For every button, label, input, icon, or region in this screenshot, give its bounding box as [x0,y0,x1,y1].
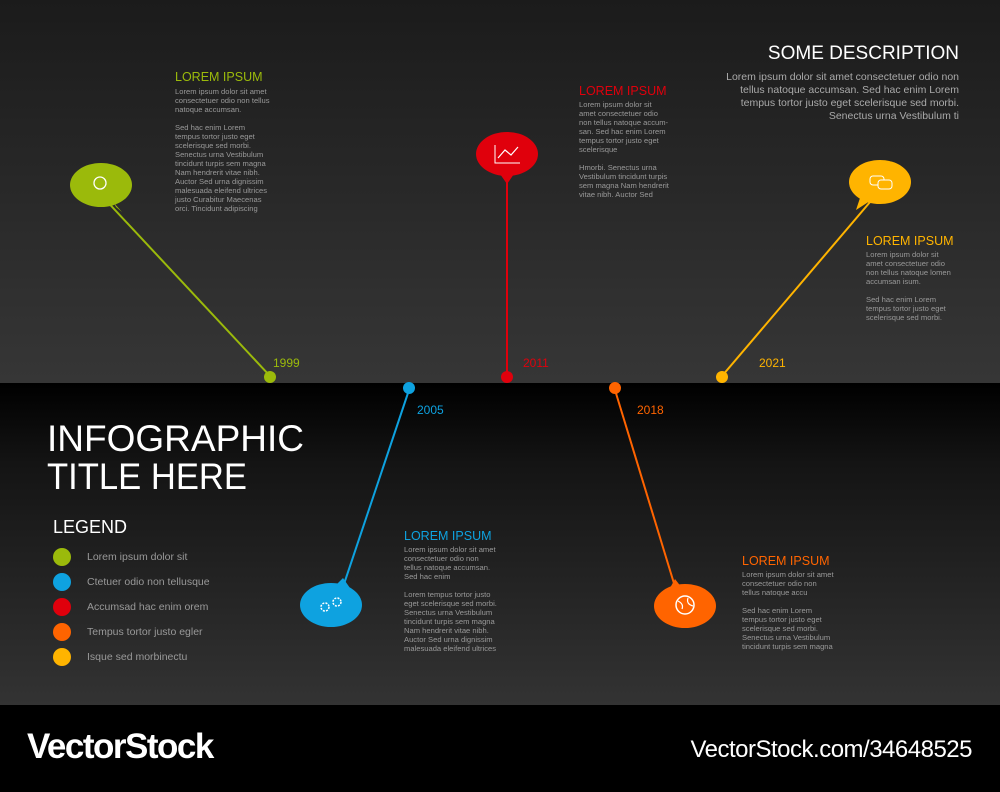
text: 2005: tincidunt turpis sem magna [404,617,496,626]
bottom background [0,383,1000,705]
text: 2021: Sed hac enim Lorem [866,295,936,304]
text: 2018: tempus tortor justo eget [742,615,823,624]
text: 1999: LOREM IPSUM [175,70,263,84]
text: 1999: Auctor Sed urna dignissim [175,177,264,186]
text: 2005: Nam hendrerit vitae nibh. [404,626,489,635]
pin: 2011 red: 2011 [523,356,549,370]
text: 2021: tempus tortor justo eget [866,304,947,313]
text: 2011: Lorem ipsum dolor sit [579,100,652,109]
pin: 2018 orange: 2018 [637,403,664,417]
description block: tellus natoque accumsan. Sed hac enim Lorem [740,84,959,96]
text: 1999: Sed hac enim Lorem [175,123,245,132]
description block: SOME DESCRIPTION [768,43,959,64]
text: 2005: LOREM IPSUM [404,529,492,543]
text: 2005: malesuada eleifend ultrices [404,644,496,653]
text: 1999: tempus tortor justo eget [175,132,256,141]
description block: tempus tortor justo eget scelerisque sed morbi. [741,97,959,109]
text: 2011: sem magna Nam hendrerit [579,181,670,190]
text: 2018: Senectus urna Vestibulum [742,633,830,642]
legend: Isque sed morbinectu [87,651,188,663]
text: 2021 [866,234,954,322]
text: 2018: consectetuer odio non [742,579,817,588]
legend [53,517,210,666]
pin: 1999 green: 1999 [273,356,300,370]
text: 2011: tempus tortor justo eget [579,136,660,145]
pin: 2021 yellow [716,160,911,383]
text: 2005: tellus natoque accumsan. [404,563,490,572]
text: 2018: tincidunt turpis sem magna [742,642,834,651]
text: 1999: tincidunt turpis sem magna [175,159,267,168]
title: INFOGRAPHIC [47,418,304,459]
text: 2021: LOREM IPSUM [866,234,954,248]
text: 2011: Hmorbi. Senectus urna [579,163,657,172]
text: 1999: consectetuer odio non tellus [175,96,270,105]
text: 1999: scelerisque sed morbi. [175,141,251,150]
text: 2011: amet consectetuer odio [579,109,658,118]
text: 1999 [174,70,270,213]
text: 1999: malesuada eleifend ultrices [175,186,267,195]
pin: 2005 blue: 2005 [417,403,444,417]
text: 2005: eget scelerisque sed morbi. [404,599,497,608]
text: 1999: natoque accumsan. [175,105,241,114]
legend: Tempus tortor justo egler [87,626,203,638]
footer bar: VectorStock [27,727,215,766]
pin: 1999 green [70,163,300,383]
footer bar [0,705,1000,787]
description block [726,43,959,122]
text: 2005: Senectus urna Vestibulum [404,608,492,617]
top background [0,0,1000,383]
description block: Lorem ipsum dolor sit amet consectetuer odio non [726,71,959,83]
title [47,418,304,497]
text: 2011: san. Sed hac enim Lorem [579,127,666,136]
text: 2011: Vestibulum tincidunt turpis [579,172,667,181]
text: 2011: LOREM IPSUM [579,84,667,98]
text: 2018: Sed hac enim Lorem [742,606,812,615]
description block: Senectus urna Vestibulum ti [829,110,959,122]
text: 2005 [404,529,497,653]
legend: LEGEND [53,517,127,537]
text: 2021: non tellus natoque lomen [866,268,951,277]
text: 1999: justo Curabitur Maecenas [174,195,262,204]
text: 2011: vitae nibh. Auctor Sed [579,190,653,199]
text: 2018: Lorem ipsum dolor sit amet [742,570,834,579]
text: 2021: accumsan isum. [866,277,921,286]
text: 2018: scelerisque sed morbi. [742,624,818,633]
pin: 2021 yellow: 2021 [759,356,786,370]
pin: 2005 blue [300,382,444,627]
text: 1999: Nam hendrerit vitae nibh. [175,168,260,177]
legend: Accumsad hac enim orem [87,601,209,613]
text: 2005: Lorem tempus tortor justo [404,590,491,599]
text: 2011: scelerisque [579,145,617,154]
pin: 2018 orange [609,382,716,628]
text: 2021: scelerisque sed morbi. [866,313,942,322]
text: 1999: orci. Tincidunt adipiscing [175,204,258,213]
legend: Ctetuer odio non tellusque [87,576,210,588]
text: 2005: Lorem ipsum dolor sit amet [404,545,496,554]
text: 2011: non tellus natoque accum- [579,118,669,127]
text: 2018: LOREM IPSUM [742,554,830,568]
text: 2021: amet consectetuer odio [866,259,945,268]
text: 2005: Auctor Sed urna dignissim [404,635,493,644]
text: 2021: Lorem ipsum dolor sit [866,250,939,259]
pin: 2011 red [476,132,549,383]
legend: Lorem ipsum dolor sit [87,551,187,563]
footer bar: VectorStock.com/34648525 [690,736,972,763]
text: 2005: Sed hac enim [404,572,450,581]
text: 2005: consectetuer odio non [404,554,479,563]
text: 1999: Lorem ipsum dolor sit amet [175,87,267,96]
text: 2018: tellus natoque accu [742,588,807,597]
text: 1999: Senectus urna Vestibulum [175,150,263,159]
text: 2011 [579,84,670,199]
title: TITLE HERE [47,456,247,497]
text: 2018 [742,554,834,651]
